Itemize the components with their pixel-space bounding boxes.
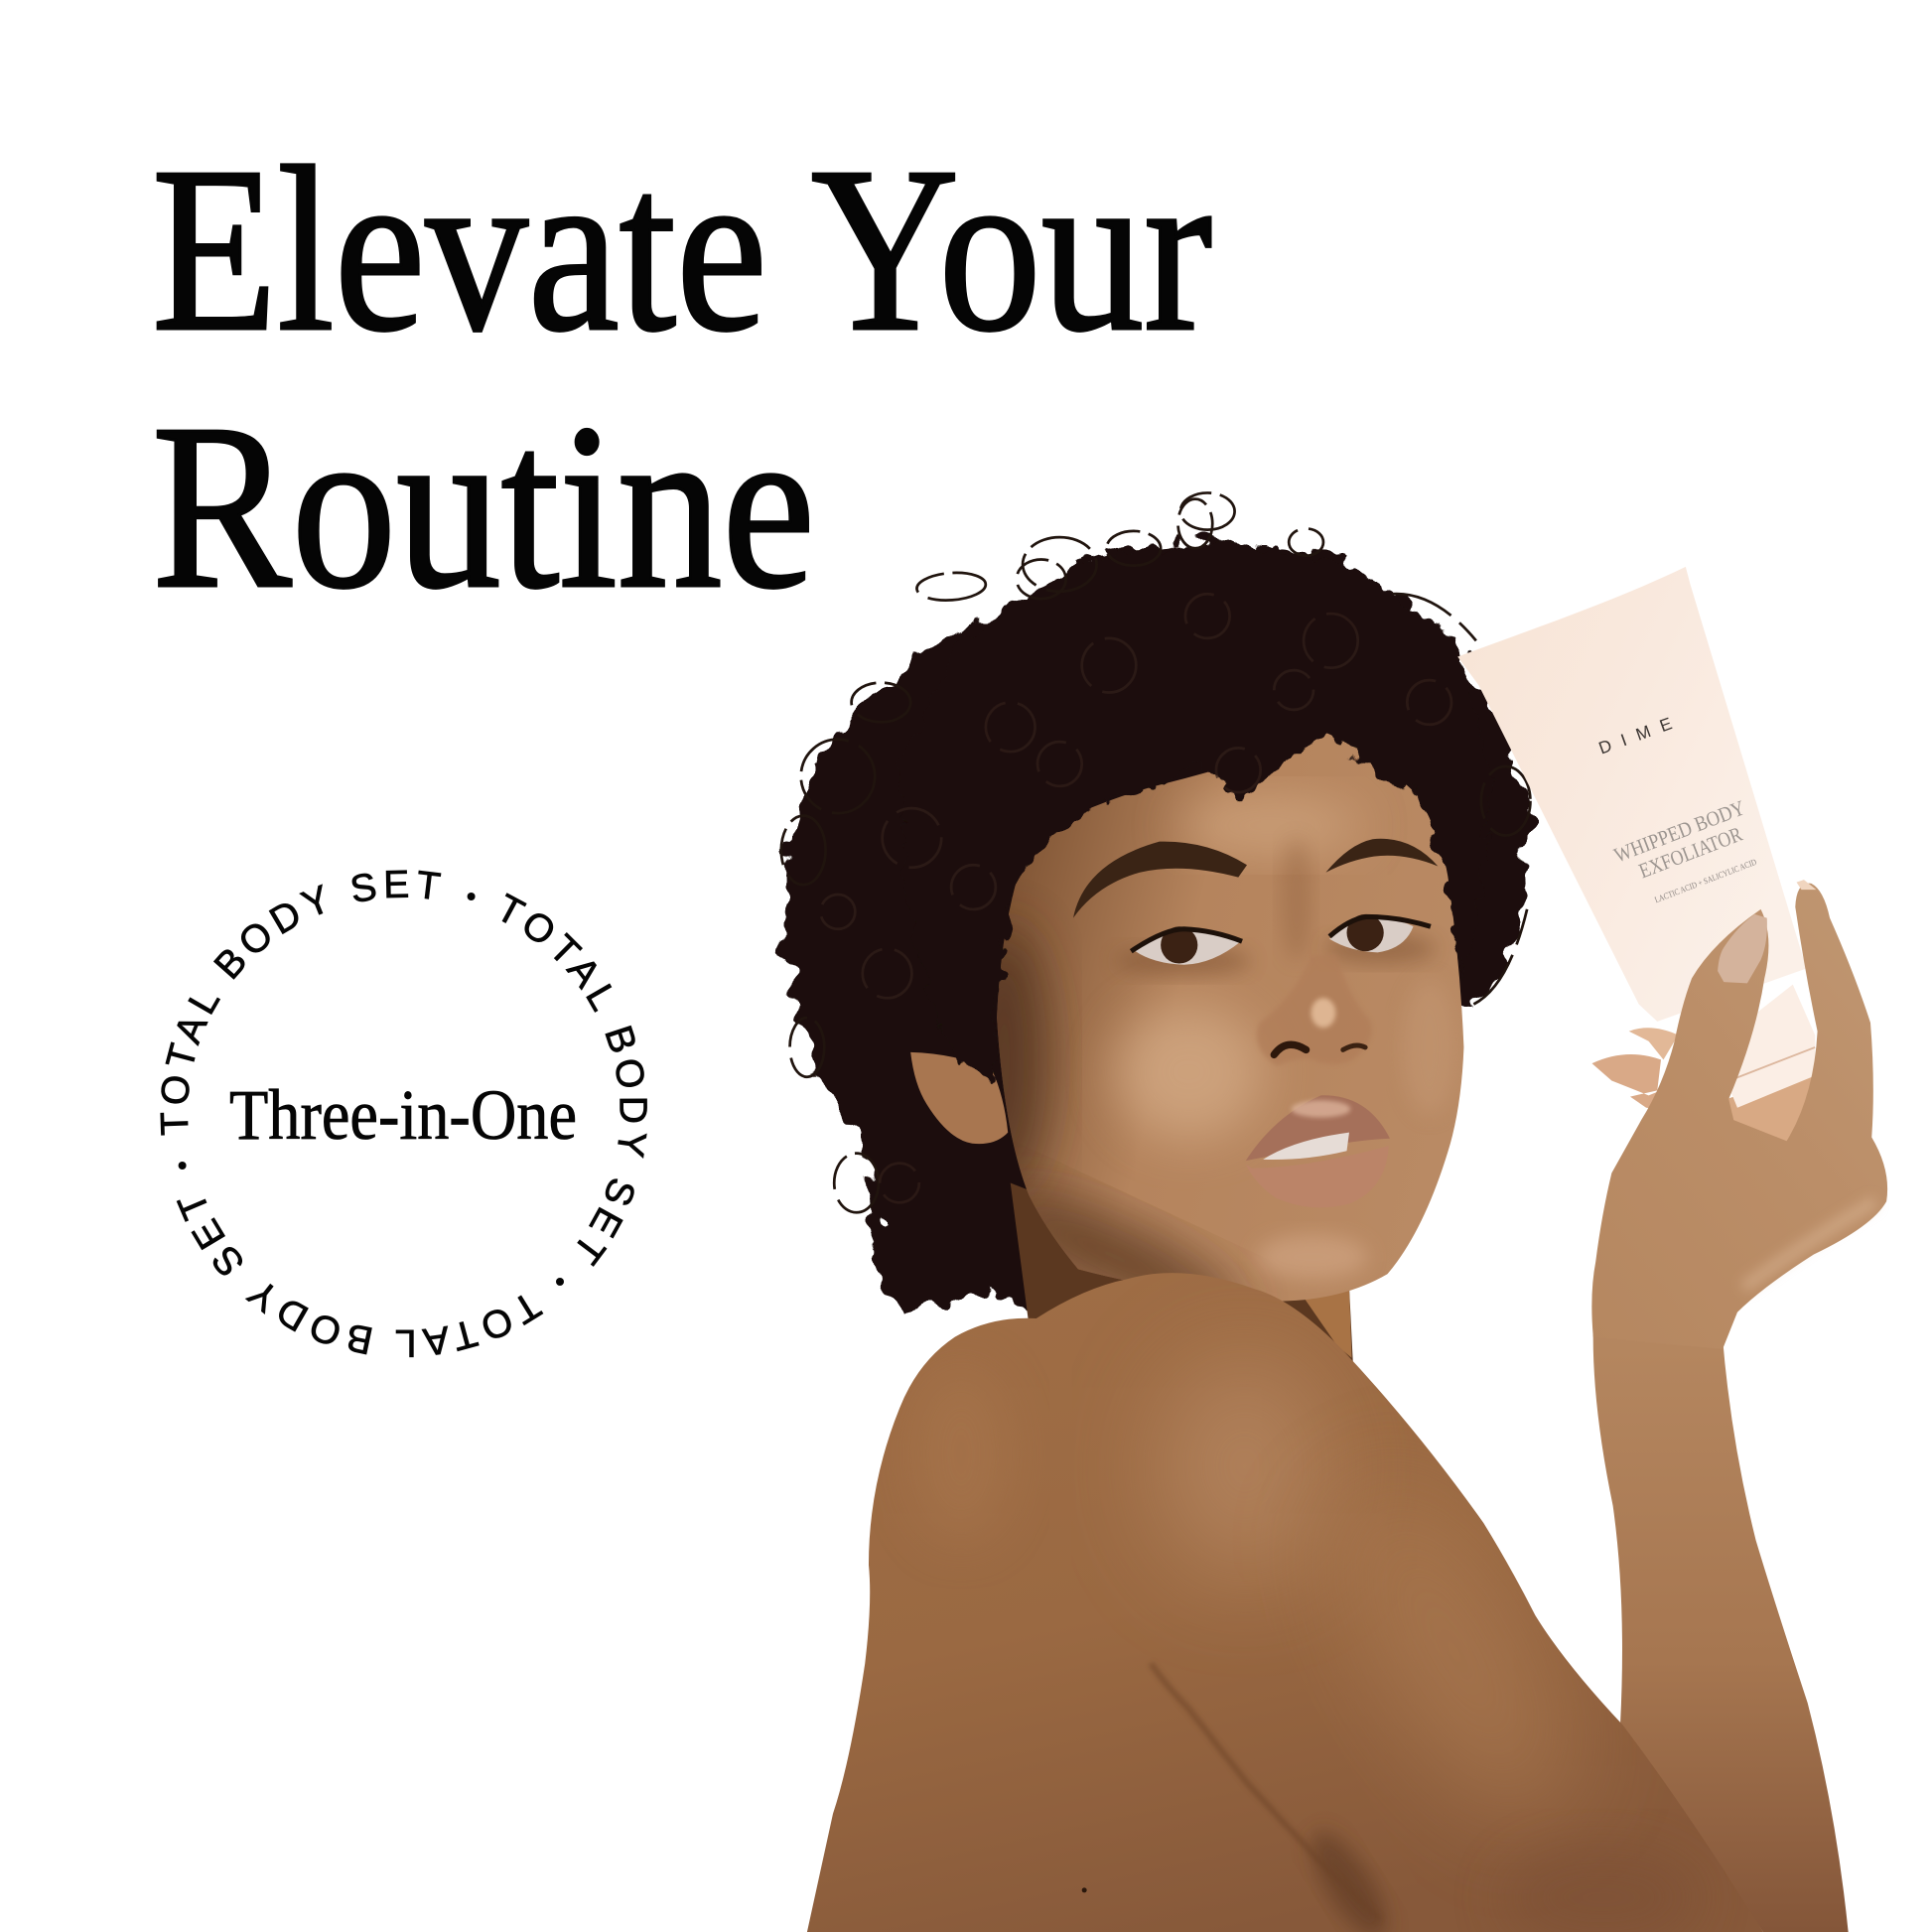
index finger nail tip: [1797, 880, 1816, 890]
tube label: product name: WHIPPED BODY: [1610, 795, 1748, 868]
title: Elevate Your Routine: [152, 119, 1212, 637]
armpit crease: [1150, 1662, 1313, 1855]
badge ring text: TOTAL BODY SET: [502, 893, 647, 1267]
hair back mass: [785, 540, 1529, 1314]
tube cap gold line: [1732, 1047, 1815, 1079]
nose: [1257, 955, 1372, 1066]
badge ring dots: [179, 893, 564, 1286]
face: [997, 733, 1463, 1301]
thumb nail: [1718, 914, 1767, 983]
tube label: ingredients: LACTIC ACID + SALICYLIC ACID: [1653, 857, 1758, 904]
badge ring text: TOTAL BODY SET: [177, 1199, 544, 1358]
lips: [1246, 1095, 1390, 1207]
badge ring text: TOTAL BODY SET: [160, 870, 441, 1136]
tube body: [1457, 567, 1806, 1022]
neck: [1011, 1182, 1353, 1361]
fingers behind tube: [1592, 1028, 1678, 1109]
hand holding tube: [1591, 880, 1887, 1349]
eyebrows: [1073, 839, 1438, 918]
fingers in notch: [1723, 1069, 1819, 1149]
badge ring text: [160, 870, 647, 1358]
mole: [1082, 1887, 1087, 1892]
hair curls at the outline: [781, 492, 1530, 1212]
ear: [910, 1052, 1008, 1144]
neck right sliver: [1302, 1289, 1351, 1358]
title: Elevate Your Routine: Elevate Your: [152, 119, 1212, 380]
tube label: product name: [1610, 795, 1748, 883]
hair inner curl texture: [821, 594, 1451, 1202]
tube cap: [1713, 985, 1815, 1108]
hair fringe over forehead: [899, 542, 1491, 1084]
model photo illustration: [781, 492, 1887, 1932]
hand highlight: [1743, 1201, 1875, 1288]
tube label: DIME: DIME: [1596, 710, 1685, 758]
left eye: [1131, 926, 1242, 965]
forearm: [1593, 1328, 1849, 1932]
circular badge: Three-in-One total body set: [160, 870, 647, 1358]
tube label: product name: EXFOLIATOR: [1635, 821, 1746, 883]
torso and upper arm: [807, 1273, 1763, 1932]
title: Elevate Your Routine: Routine: [152, 376, 815, 637]
badge centre text: Three-in-One: [229, 1075, 577, 1155]
right eye: [1329, 914, 1431, 952]
product tube: [1457, 567, 1815, 1108]
